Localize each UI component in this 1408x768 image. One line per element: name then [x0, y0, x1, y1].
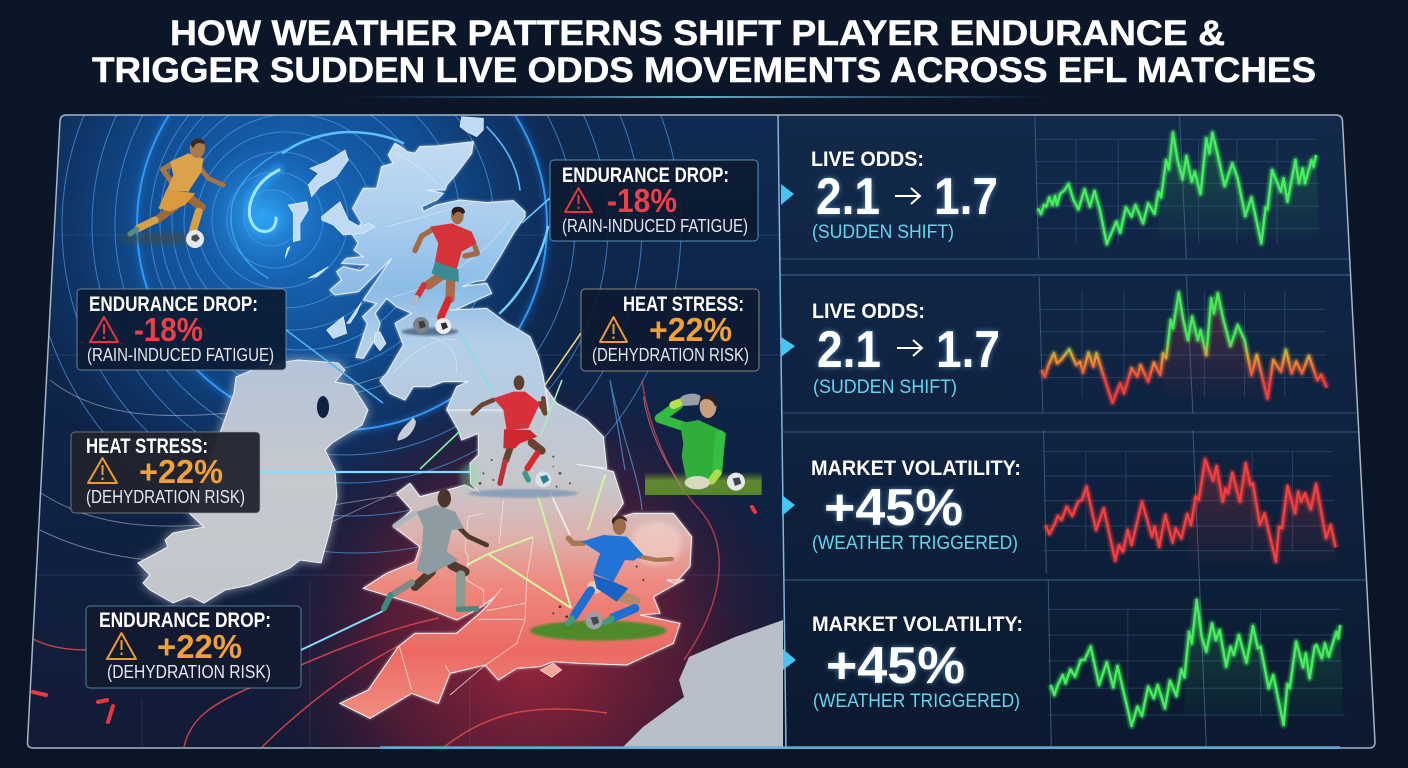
heat lines	[33, 380, 719, 747]
row 4: market volatility: (WEATHER TRIGGERED)	[813, 691, 1020, 712]
marker	[783, 649, 796, 670]
callout: heat stress, right: +22%	[649, 311, 732, 348]
icon: warning	[90, 317, 118, 342]
row 2: live odds	[781, 300, 1000, 398]
row 3: market volatility: +45%	[824, 479, 963, 537]
row 1: live odds	[781, 148, 998, 243]
callout: heat stress, left	[71, 432, 260, 513]
blue isobars, east	[610, 380, 642, 510]
callout: endurance drop, bottom	[86, 606, 301, 688]
title: HOW WEATHER PATTERNS SHIFT PLAYER ENDURANCE &	[170, 14, 1225, 53]
callout: heat stress, right	[581, 289, 759, 371]
marker	[782, 495, 795, 516]
callout: endurance drop, left: (RAIN-INDUCED FATIGUE)	[87, 345, 274, 365]
row 2: live odds: LIVE ODDS:	[812, 300, 925, 323]
callout: endurance drop, top right: -18%	[607, 182, 677, 219]
isobars	[40, 375, 403, 561]
chart: row 4 green line	[1048, 580, 1345, 747]
callout: heat stress, right: HEAT STRESS:	[623, 293, 744, 316]
player: gold	[120, 138, 223, 248]
storm eye swirl	[231, 148, 290, 278]
row 1: live odds: 1.7	[934, 168, 998, 226]
storm bright ring	[132, 116, 552, 435]
title: TRIGGER SUDDEN LIVE ODDS MOVEMENTS ACROSS EFL MATCHES	[92, 51, 1316, 90]
chart: row 2 green and red line	[1039, 277, 1327, 413]
islands	[285, 117, 483, 351]
marker	[781, 337, 795, 357]
county lines	[399, 500, 533, 695]
panel dividers	[781, 259, 1370, 580]
icon: warning	[565, 188, 592, 212]
player: grey, Wales	[384, 489, 487, 609]
callout: heat stress, left: (DEHYDRATION RISK)	[86, 487, 245, 507]
row 4: market volatility: +45%	[826, 637, 965, 695]
callout: endurance drop, left: -18%	[134, 311, 203, 348]
row 2: live odds: 1.7	[936, 321, 1000, 379]
icon: warning	[107, 633, 136, 659]
icon: warning	[600, 317, 627, 342]
chart: row 3 red line	[1044, 430, 1336, 580]
player: goalkeeper	[643, 394, 762, 495]
land: Ireland	[138, 360, 368, 603]
callout: endurance drop, top right	[550, 160, 758, 241]
row 1: live odds: LIVE ODDS:	[811, 148, 924, 171]
callout: heat stress, right: (DEHYDRATION RISK)	[592, 345, 749, 365]
chart: row 1 green line	[1035, 117, 1320, 258]
callout: heat stress, left: HEAT STRESS:	[86, 435, 208, 458]
row 4: market volatility	[783, 613, 1023, 712]
icon: warning	[88, 458, 117, 483]
row 4: market volatility: MARKET VOLATILITY:	[812, 613, 1023, 636]
panel border	[27, 115, 1375, 748]
row 3: market volatility	[782, 457, 1021, 554]
arrow	[895, 188, 920, 204]
callout: endurance drop, left: ENDURANCE DROP:	[89, 293, 258, 316]
marker	[781, 184, 794, 205]
panel: dashboard frame	[27, 115, 1378, 748]
land: Scotland	[285, 117, 548, 410]
arrow	[897, 340, 922, 356]
row 3: market volatility: MARKET VOLATILITY:	[811, 457, 1021, 480]
map grid	[30, 235, 780, 747]
title	[92, 14, 1316, 90]
row 1: live odds: (SUDDEN SHIFT)	[812, 222, 954, 243]
callout: endurance drop, bottom: (DEHYDRATION RISK)	[107, 662, 271, 682]
highland contours	[387, 153, 510, 373]
player: red, northern England	[468, 375, 578, 498]
row 3: market volatility: (WEATHER TRIGGERED)	[812, 533, 1018, 554]
callout: endurance drop, left	[77, 289, 286, 370]
row 1: live odds: 2.1	[816, 168, 880, 226]
callout: endurance drop, top right: ENDURANCE DROP:	[562, 164, 729, 187]
player: red, Scotland	[402, 207, 477, 336]
player: blue, southern England	[530, 515, 672, 641]
land: England and Wales	[340, 380, 692, 718]
row 2: live odds: (SUDDEN SHIFT)	[813, 377, 957, 398]
panel: weather map	[31, 116, 783, 748]
storm rings	[50, 116, 682, 554]
land: France	[620, 620, 783, 750]
callout: endurance drop, bottom: ENDURANCE DROP:	[99, 609, 271, 632]
heat dashes	[33, 507, 755, 722]
callout: endurance drop, top right: (RAIN-INDUCED FATIGUE)	[562, 216, 748, 236]
callout: endurance drop, bottom: +22%	[157, 628, 242, 665]
row 2: live odds: 2.1	[817, 321, 881, 379]
callout: heat stress, left: +22%	[139, 453, 223, 490]
connector lines	[260, 198, 605, 650]
